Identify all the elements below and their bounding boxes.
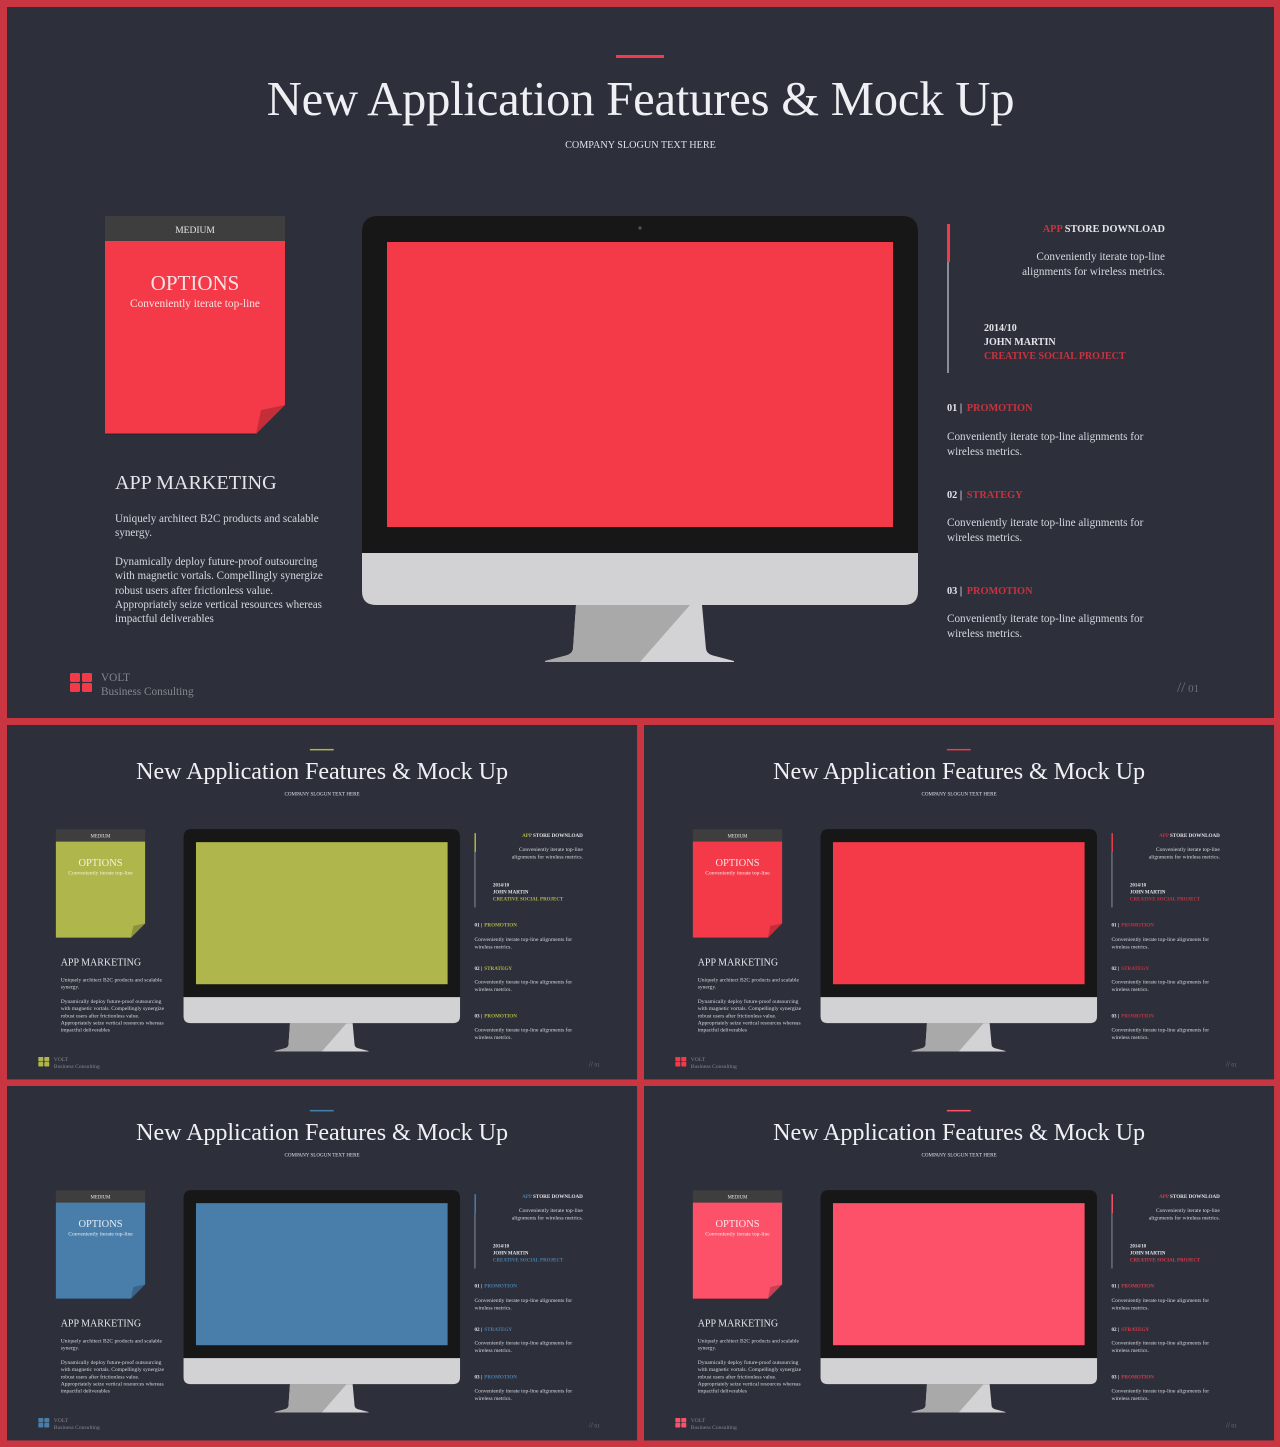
page number: // 01 xyxy=(589,1060,600,1068)
accent bar xyxy=(616,55,664,58)
note heading: OPTIONS xyxy=(151,271,239,295)
accent bar xyxy=(947,1110,971,1111)
store text: Conveniently iterate top-line xyxy=(1036,251,1165,263)
item 03: 03 | PROMOTION xyxy=(474,1014,517,1019)
sticky note xyxy=(693,1190,782,1299)
timeline rule xyxy=(474,833,476,908)
marketing copy xyxy=(61,1338,164,1395)
item 03 text xyxy=(947,613,1144,640)
marketing copy: with magnetic vortals. Compellingly synergize xyxy=(61,1006,164,1012)
marketing copy: Dynamically deploy future-proof outsourcing xyxy=(115,556,317,568)
note heading: OPTIONS xyxy=(78,1218,123,1230)
note text: Conveniently iterate top-line xyxy=(705,1231,770,1237)
company name: Business Consulting xyxy=(101,686,194,698)
note label: MEDIUM xyxy=(91,834,110,839)
item 03 text: wireless metrics. xyxy=(474,1395,512,1401)
item 01 text: Conveniently iterate top-line alignments for xyxy=(1111,936,1209,942)
author block: JOHN MARTIN xyxy=(493,890,528,895)
marketing copy xyxy=(698,1338,801,1395)
store text xyxy=(1022,251,1165,278)
logo icon xyxy=(675,1057,686,1066)
item 02 text: wireless metrics. xyxy=(947,532,1022,544)
slogan: COMPANY SLOGUN TEXT HERE xyxy=(565,140,716,151)
slide: pink xyxy=(644,1086,1274,1440)
author block: JOHN MARTIN xyxy=(984,337,1056,348)
author block xyxy=(1130,883,1200,902)
marketing copy: synergy. xyxy=(698,984,716,990)
marketing copy: Uniquely architect B2C products and scalable xyxy=(115,513,319,525)
sticky note xyxy=(105,216,285,434)
item 03: 03 | PROMOTION xyxy=(1111,1014,1154,1019)
item 03 text xyxy=(474,1027,572,1040)
author block: CREATIVE SOCIAL PROJECT xyxy=(493,1257,563,1263)
store text: Conveniently iterate top-line xyxy=(1156,1208,1220,1214)
slide: green xyxy=(7,725,637,1079)
page number: // 01 xyxy=(1226,1060,1237,1068)
page number: // 01 xyxy=(1226,1421,1237,1429)
store text: alignments for wireless metrics. xyxy=(1149,854,1220,860)
slide: blue xyxy=(7,1086,637,1440)
company name: VOLT xyxy=(691,1057,705,1062)
note heading: OPTIONS xyxy=(715,857,760,869)
item 03 text: Conveniently iterate top-line alignments for xyxy=(474,1388,572,1394)
author block: 2014/10 xyxy=(493,883,509,888)
note heading: OPTIONS xyxy=(78,857,123,869)
item 02 text: wireless metrics. xyxy=(1111,987,1149,993)
item 01: 01 | PROMOTION xyxy=(474,922,517,928)
slogan: COMPANY SLOGUN TEXT HERE xyxy=(285,791,360,797)
monitor xyxy=(184,829,460,1052)
marketing copy: impactful deliverables xyxy=(61,1027,110,1033)
company name xyxy=(54,1417,100,1431)
store heading: APP STORE DOWNLOAD xyxy=(522,1194,583,1200)
marketing copy: robust users after frictionless value. xyxy=(61,1374,139,1380)
timeline rule xyxy=(947,224,950,373)
item 02: 02 | STRATEGY xyxy=(1111,1327,1149,1332)
item 03 text: Conveniently iterate top-line alignments for xyxy=(474,1027,572,1033)
marketing copy: synergy. xyxy=(61,1345,79,1351)
item 01 text xyxy=(474,936,572,950)
author block: JOHN MARTIN xyxy=(1130,1251,1165,1256)
item 02 text xyxy=(1111,979,1209,993)
item 01 text: wireless metrics. xyxy=(474,1305,512,1311)
title: New Application Features & Mock Up xyxy=(773,757,1145,784)
marketing copy: impactful deliverables xyxy=(115,613,214,625)
item 02 text xyxy=(474,1340,572,1354)
marketing heading: APP MARKETING xyxy=(115,472,277,494)
store text: Conveniently iterate top-line xyxy=(519,1208,583,1214)
note label: MEDIUM xyxy=(175,226,215,236)
marketing copy: Uniquely architect B2C products and scalable xyxy=(61,1338,162,1344)
company name: Business Consulting xyxy=(691,1063,737,1069)
author block: 2014/10 xyxy=(1130,883,1146,888)
store text xyxy=(512,1207,583,1222)
author block: 2014/10 xyxy=(493,1244,509,1249)
marketing copy: Appropriately seize vertical resources whereas xyxy=(61,1020,164,1026)
timeline rule xyxy=(1111,1194,1113,1268)
store text: alignments for wireless metrics. xyxy=(512,1215,583,1221)
marketing heading: APP MARKETING xyxy=(698,1318,778,1329)
marketing copy: with magnetic vortals. Compellingly synergize xyxy=(698,1367,801,1373)
sticky note xyxy=(56,1190,145,1299)
item 02 text: wireless metrics. xyxy=(474,987,512,993)
author block: CREATIVE SOCIAL PROJECT xyxy=(493,896,563,902)
author block: JOHN MARTIN xyxy=(1130,890,1165,895)
author block: JOHN MARTIN xyxy=(493,1251,528,1256)
note heading: OPTIONS xyxy=(715,1218,760,1230)
accent bar xyxy=(947,749,971,750)
sticky note xyxy=(692,830,782,938)
title: New Application Features & Mock Up xyxy=(267,72,1014,126)
store text xyxy=(512,847,583,860)
item 01 text xyxy=(1111,1297,1209,1312)
company name xyxy=(691,1417,737,1431)
marketing copy: Uniquely architect B2C products and scalable xyxy=(698,977,799,983)
marketing copy: impactful deliverables xyxy=(61,1388,110,1394)
marketing copy: Uniquely architect B2C products and scalable xyxy=(698,1338,799,1344)
slide: red xyxy=(644,725,1274,1079)
marketing copy: synergy. xyxy=(698,1345,716,1351)
monitor xyxy=(362,216,918,662)
item 02 text xyxy=(947,517,1144,544)
store text: Conveniently iterate top-line xyxy=(1156,847,1220,853)
item 03 text xyxy=(1111,1027,1209,1041)
marketing copy: synergy. xyxy=(61,984,79,990)
item 02 text: wireless metrics. xyxy=(1111,1348,1149,1354)
author block xyxy=(493,1243,563,1264)
item 03: 03 | PROMOTION xyxy=(947,586,1033,597)
author block xyxy=(984,323,1126,362)
marketing copy: robust users after frictionless value. xyxy=(698,1013,776,1019)
item 02 text: wireless metrics. xyxy=(474,1348,512,1354)
item 01 text xyxy=(474,1297,572,1312)
marketing copy: synergy. xyxy=(115,527,152,539)
item 02: 02 | STRATEGY xyxy=(474,966,512,971)
item 02: 02 | STRATEGY xyxy=(947,490,1023,501)
company name: VOLT xyxy=(54,1057,68,1062)
title: New Application Features & Mock Up xyxy=(136,757,508,784)
store heading: APP STORE DOWNLOAD xyxy=(1043,224,1165,235)
item 03 text: Conveniently iterate top-line alignments for xyxy=(1111,1388,1209,1394)
store text: alignments for wireless metrics. xyxy=(1149,1215,1220,1221)
item 01 text: wireless metrics. xyxy=(1111,1305,1149,1311)
slogan: COMPANY SLOGUN TEXT HERE xyxy=(922,1152,997,1158)
slogan: COMPANY SLOGUN TEXT HERE xyxy=(285,1152,360,1158)
author block: CREATIVE SOCIAL PROJECT xyxy=(984,351,1126,362)
item 03: 03 | PROMOTION xyxy=(1111,1375,1154,1380)
company name: Business Consulting xyxy=(691,1424,737,1430)
item 01: 01 | PROMOTION xyxy=(474,1283,517,1289)
item 01: 01 | PROMOTION xyxy=(947,403,1033,414)
title: New Application Features & Mock Up xyxy=(773,1118,1145,1145)
item 03 text: wireless metrics. xyxy=(947,628,1022,640)
company name: VOLT xyxy=(101,672,130,684)
item 03 text: wireless metrics. xyxy=(474,1034,512,1040)
item 02 text: Conveniently iterate top-line alignments for xyxy=(947,517,1143,529)
item 03 text xyxy=(474,1388,572,1402)
marketing copy: Dynamically deploy future-proof outsourcing xyxy=(61,1360,161,1366)
accent bar xyxy=(310,1110,334,1111)
timeline rule xyxy=(1111,833,1113,908)
item 01: 01 | PROMOTION xyxy=(1111,922,1154,928)
item 03 text: Conveniently iterate top-line alignments for xyxy=(947,613,1143,625)
marketing copy: with magnetic vortals. Compellingly synergize xyxy=(115,570,323,582)
author block: CREATIVE SOCIAL PROJECT xyxy=(1130,1257,1200,1263)
marketing heading: APP MARKETING xyxy=(61,1318,141,1329)
item 01 text: Conveniently iterate top-line alignments for xyxy=(474,936,572,942)
logo icon xyxy=(675,1418,686,1427)
title: New Application Features & Mock Up xyxy=(136,1118,508,1145)
author block xyxy=(493,883,564,902)
author block: 2014/10 xyxy=(984,323,1017,334)
marketing copy: Appropriately seize vertical resources whereas xyxy=(698,1020,801,1026)
note text: Conveniently iterate top-line xyxy=(68,870,133,876)
marketing copy: Appropriately seize vertical resources whereas xyxy=(115,599,322,611)
item 02 text: Conveniently iterate top-line alignments for xyxy=(1111,1340,1209,1346)
logo icon xyxy=(70,673,92,692)
store heading: APP STORE DOWNLOAD xyxy=(1159,833,1220,839)
item 01 text: wireless metrics. xyxy=(947,446,1022,458)
logo icon xyxy=(38,1057,50,1066)
author block xyxy=(1130,1243,1200,1264)
item 01: 01 | PROMOTION xyxy=(1111,1283,1154,1289)
company name: VOLT xyxy=(54,1418,68,1423)
item 02: 02 | STRATEGY xyxy=(1111,966,1149,971)
sticky note xyxy=(56,830,146,938)
company name: VOLT xyxy=(691,1418,705,1423)
store text xyxy=(1149,1207,1220,1222)
logo icon xyxy=(38,1418,49,1427)
marketing copy xyxy=(60,977,164,1033)
marketing heading: APP MARKETING xyxy=(61,957,141,968)
accent bar xyxy=(310,749,334,750)
item 02 text xyxy=(1111,1340,1209,1354)
item 02 text: Conveniently iterate top-line alignments for xyxy=(474,979,572,985)
marketing copy: robust users after frictionless value. xyxy=(698,1374,776,1380)
item 01 text xyxy=(947,431,1144,458)
monitor xyxy=(644,1086,1274,1440)
store heading: APP STORE DOWNLOAD xyxy=(522,833,583,839)
marketing copy: robust users after frictionless value. xyxy=(115,585,273,597)
note label: MEDIUM xyxy=(728,1195,747,1200)
item 03 text: wireless metrics. xyxy=(1111,1034,1149,1040)
slide: main red xyxy=(7,7,1274,718)
item 03 text: Conveniently iterate top-line alignments for xyxy=(1111,1027,1209,1033)
company name: Business Consulting xyxy=(54,1063,100,1069)
store heading: APP STORE DOWNLOAD xyxy=(1159,1194,1220,1200)
monitor xyxy=(7,1086,637,1440)
note label: MEDIUM xyxy=(91,1195,110,1200)
marketing heading: APP MARKETING xyxy=(698,957,778,968)
marketing copy xyxy=(698,977,801,1033)
marketing copy xyxy=(115,513,323,625)
company name xyxy=(54,1057,100,1069)
item 01 text: wireless metrics. xyxy=(474,944,512,950)
author block: CREATIVE SOCIAL PROJECT xyxy=(1130,896,1200,902)
page number: // 01 xyxy=(589,1421,600,1429)
item 03 text xyxy=(1111,1388,1209,1402)
store text: alignments for wireless metrics. xyxy=(1022,266,1165,278)
author block: 2014/10 xyxy=(1130,1244,1146,1249)
page number: // 01 xyxy=(1177,680,1199,696)
store text: alignments for wireless metrics. xyxy=(512,854,583,860)
marketing copy: with magnetic vortals. Compellingly synergize xyxy=(61,1367,164,1373)
note text: Conveniently iterate top-line xyxy=(68,1231,133,1237)
item 03 text: wireless metrics. xyxy=(1111,1395,1149,1401)
note text: Conveniently iterate top-line xyxy=(130,298,260,310)
company name: Business Consulting xyxy=(54,1424,100,1430)
item 03: 03 | PROMOTION xyxy=(474,1375,517,1380)
marketing copy: with magnetic vortals. Compellingly synergize xyxy=(698,1006,801,1012)
store text: Conveniently iterate top-line xyxy=(519,847,583,853)
item 02: 02 | STRATEGY xyxy=(474,1327,512,1332)
marketing copy: impactful deliverables xyxy=(698,1027,747,1033)
marketing copy: Appropriately seize vertical resources whereas xyxy=(61,1381,164,1387)
marketing copy: Dynamically deploy future-proof outsourcing xyxy=(698,999,798,1005)
item 01 text: Conveniently iterate top-line alignments for xyxy=(947,431,1143,443)
monitor xyxy=(820,829,1098,1052)
note label: MEDIUM xyxy=(728,834,747,839)
item 01 text: Conveniently iterate top-line alignments for xyxy=(474,1297,572,1303)
marketing copy: Appropriately seize vertical resources whereas xyxy=(698,1381,801,1387)
item 02 text xyxy=(474,979,572,993)
store text xyxy=(1148,847,1220,860)
note text: Conveniently iterate top-line xyxy=(705,870,770,876)
marketing copy: Dynamically deploy future-proof outsourcing xyxy=(61,999,161,1005)
item 01 text: Conveniently iterate top-line alignments for xyxy=(1111,1297,1209,1303)
marketing copy: Dynamically deploy future-proof outsourcing xyxy=(698,1360,798,1366)
item 02 text: Conveniently iterate top-line alignments for xyxy=(474,1340,572,1346)
slogan: COMPANY SLOGUN TEXT HERE xyxy=(922,791,997,797)
item 02 text: Conveniently iterate top-line alignments for xyxy=(1111,979,1209,985)
marketing copy: robust users after frictionless value. xyxy=(61,1013,139,1019)
marketing copy: Uniquely architect B2C products and scalable xyxy=(61,977,162,983)
company name xyxy=(101,672,194,698)
item 01 text xyxy=(1111,936,1209,951)
item 01 text: wireless metrics. xyxy=(1111,944,1149,950)
company name xyxy=(691,1056,737,1070)
marketing copy: impactful deliverables xyxy=(698,1388,747,1394)
timeline rule xyxy=(474,1194,476,1268)
